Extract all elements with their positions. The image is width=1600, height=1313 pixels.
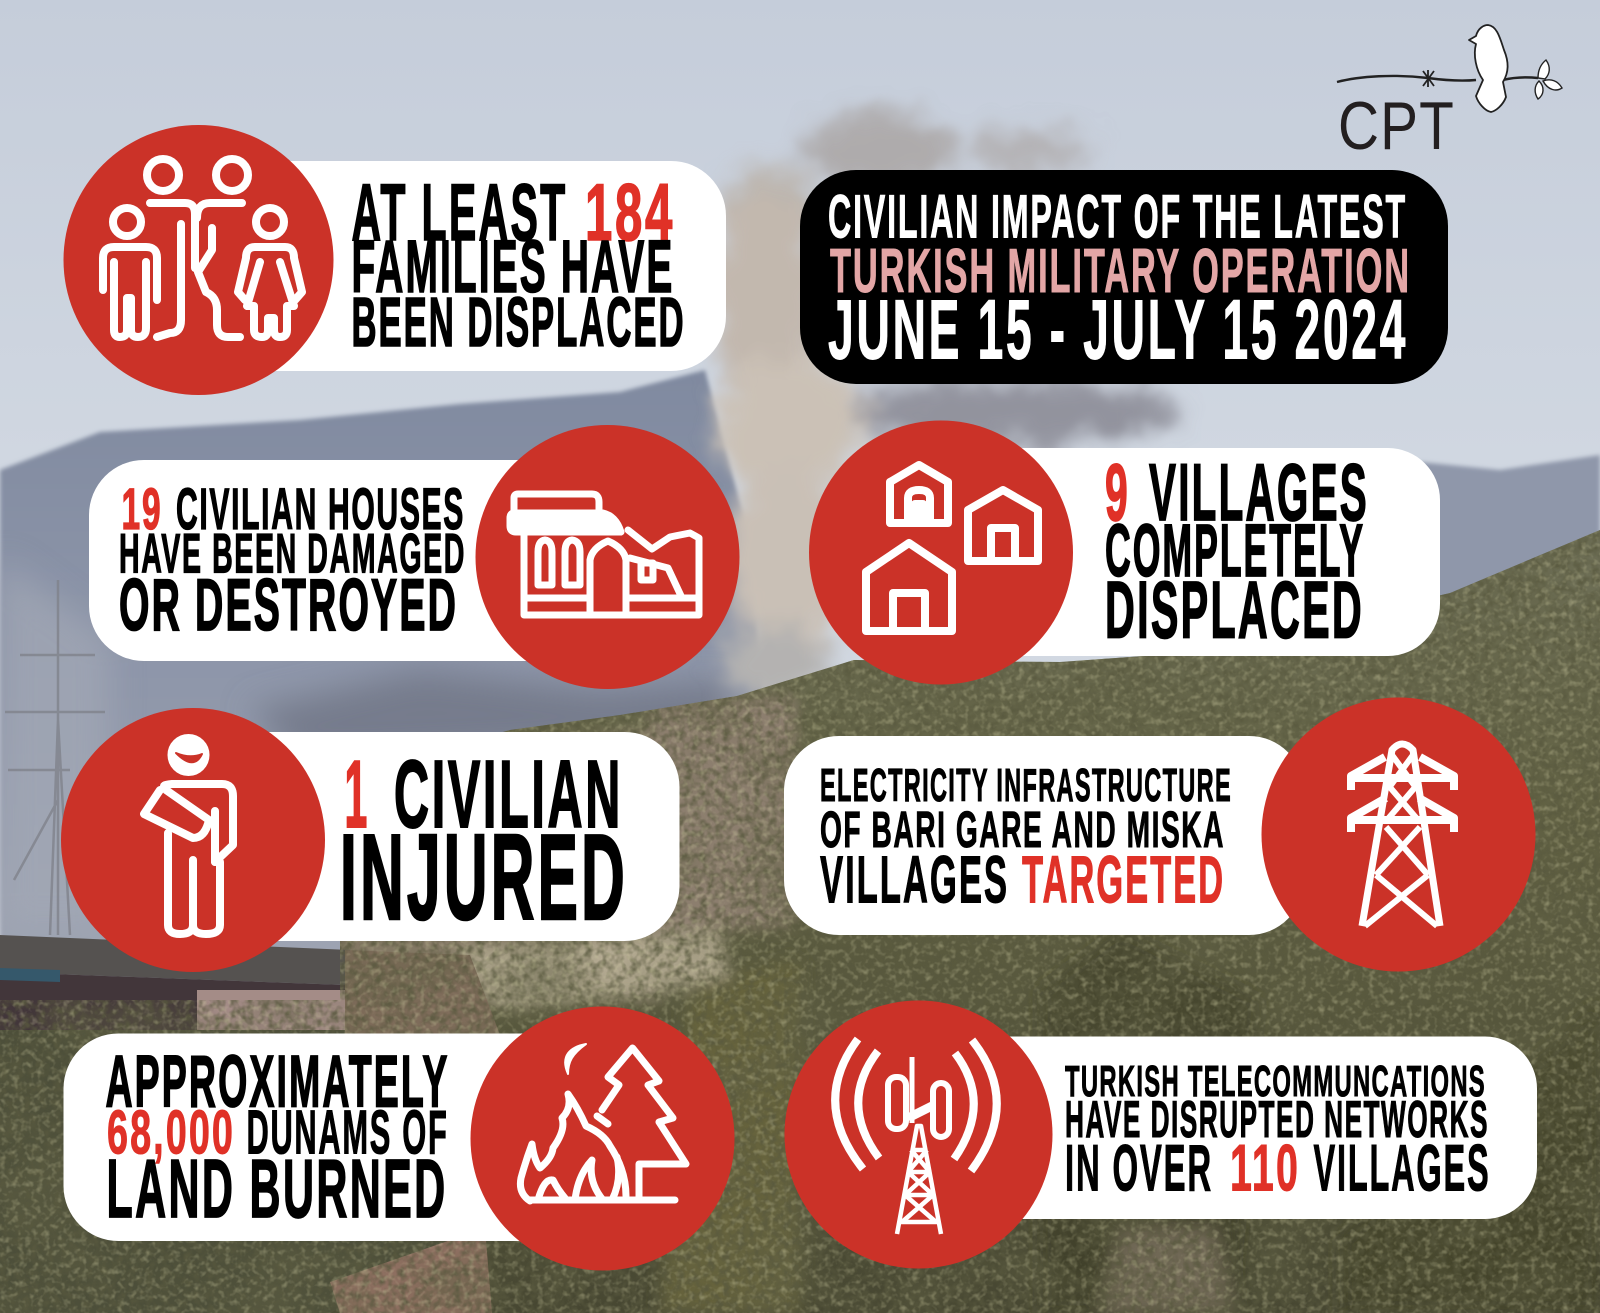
icon: family [103, 159, 302, 337]
logo: CPT dove on barbed wire: CPT [1338, 88, 1455, 164]
panel: electricity infrastructure [784, 698, 1536, 972]
panel: title [800, 170, 1448, 384]
text: land burned [106, 1042, 449, 1235]
text: houses: 19 [122, 477, 162, 542]
text: families: AT LEAST [352, 168, 568, 258]
panel: telecommunications [784, 1000, 1537, 1268]
text: electricity: OF BARI GARE AND MISKA [820, 801, 1225, 858]
text: villages [1105, 448, 1369, 656]
text: injured [340, 741, 628, 945]
text: villages: DISPLACED [1105, 566, 1364, 656]
panel: families displaced [64, 125, 726, 395]
text: electricity: TARGETED [1022, 842, 1225, 918]
text: telecommunications: IN OVER [1065, 1130, 1213, 1204]
icon: three houses [866, 465, 1038, 631]
icon: burning tree [520, 1044, 686, 1201]
text: villages: 9 [1105, 448, 1130, 538]
text: telecommunications [1065, 1057, 1490, 1204]
panel: land burned [64, 1006, 734, 1270]
text: families: FAMILIES HAVE [352, 225, 674, 308]
text: injured: 1 [344, 741, 370, 848]
text: families: 184 [585, 168, 675, 258]
text: houses: HAVE BEEN DAMAGED [119, 522, 466, 584]
title text [828, 182, 1411, 376]
text: injured: CIVILIAN [394, 741, 623, 848]
text: houses: OR DESTROYED [119, 565, 458, 646]
logo: CPT dove on barbed wire [1337, 25, 1562, 164]
text: houses [119, 477, 466, 646]
text: land burned: LAND BURNED [106, 1142, 448, 1235]
panel: houses damaged [89, 425, 740, 689]
icon: signal tower [835, 1039, 997, 1234]
text: land burned: APPROXIMATELY [106, 1042, 449, 1122]
text: telecommunications: 110 [1230, 1130, 1300, 1204]
text: electricity [820, 759, 1232, 918]
panel: civilian injured: INJURED [340, 809, 628, 945]
panel: villages displaced: VILLAGES [1149, 448, 1369, 538]
text: land burned: 68,000 [107, 1098, 235, 1168]
panel: villages displaced [809, 420, 1440, 684]
text: electricity: VILLAGES [820, 842, 1009, 918]
icon: power pylon [1351, 744, 1454, 926]
icon: ruined house [510, 494, 699, 615]
panel: families displaced: BEEN DISPLACED [352, 283, 686, 361]
text: electricity: ELECTRICITY INFRASTRUCTURE [820, 759, 1232, 811]
panel: civilian injured [61, 708, 680, 972]
panel: land burned: DUNAMS OF [246, 1098, 448, 1168]
icon: injured person [144, 738, 233, 934]
text: houses: CIVILIAN HOUSES [176, 477, 465, 542]
text: families [352, 168, 686, 361]
